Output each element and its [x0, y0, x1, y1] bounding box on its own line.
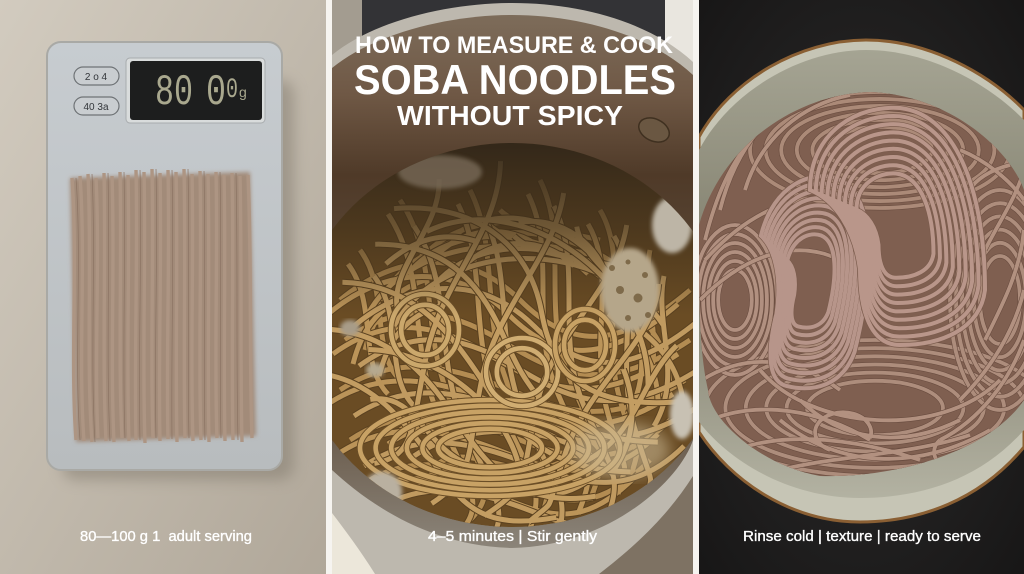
scale button 2 — [74, 97, 119, 115]
panel: measure — [0, 0, 326, 574]
title: WITHOUT SPICY — [397, 100, 623, 131]
scale display: 0 — [226, 75, 238, 106]
noodle skein lower left — [758, 174, 866, 391]
pot inner wall — [332, 15, 693, 548]
scale display: 80 — [155, 68, 193, 118]
title: HOW TO MEASURE & COOK — [355, 32, 674, 59]
pot rim — [332, 3, 693, 574]
scale button 1: 2 o 4 — [85, 72, 108, 83]
scale button 1 — [74, 67, 119, 85]
pot vent — [638, 117, 670, 143]
foam — [340, 155, 694, 512]
panel: serve — [693, 0, 1024, 574]
soba noodles — [693, 92, 1024, 476]
panel: cook — [332, 0, 693, 574]
caption: rinse and serve: Rinse cold | texture | ready to serve — [743, 528, 981, 545]
noodle bundle — [70, 169, 256, 443]
title — [354, 32, 676, 131]
title: SOBA NOODLES — [354, 56, 676, 103]
icon: kitchen scale — [47, 42, 282, 470]
bowl — [699, 40, 1024, 522]
boiling water and noodles — [332, 143, 693, 527]
scale display: 0 — [206, 68, 226, 118]
panel dividers — [326, 0, 699, 574]
caption: serving size: 80—100 g 1 adult serving — [80, 528, 252, 545]
scale display — [130, 61, 262, 120]
scale button 2: 40 3a — [83, 102, 109, 113]
pot handle — [362, 0, 665, 44]
caption: cooking time: 4–5 minutes | Stir gently — [428, 528, 598, 545]
water shading — [332, 143, 693, 308]
noodle skein centre — [810, 108, 985, 345]
scale display: g — [239, 84, 247, 100]
